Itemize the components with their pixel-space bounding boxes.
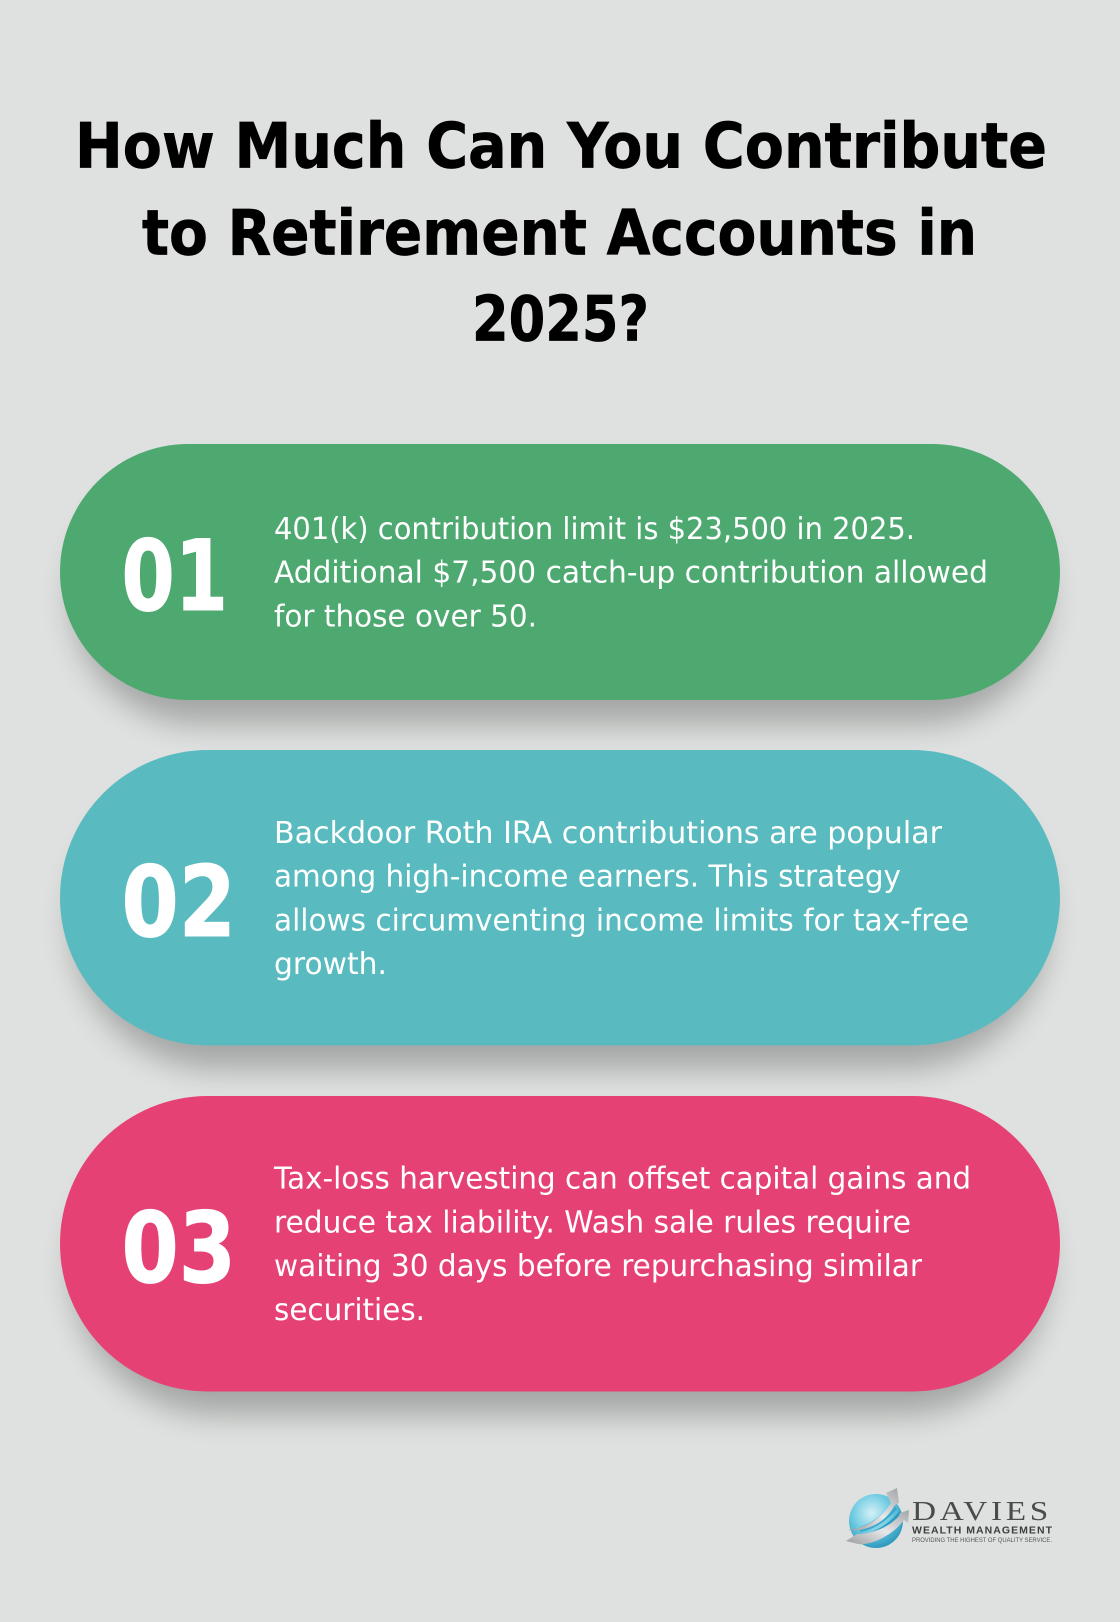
icon: globe with arrows [846,1488,909,1548]
panel: Tax-loss harvesting [60,1096,1060,1415]
wordmark: WEALTH MANAGEMENT [912,1524,1053,1536]
text block: Backdoor Roth [274,816,969,982]
number 03: 03 [122,1192,236,1306]
text block: Tax-loss harvesting: securities. [274,1293,425,1328]
text block: Backdoor Roth: Backdoor Roth IRA contributions are popular [274,816,943,851]
wordmark: PROVIDING THE HIGHEST OF QUALITY SERVICE. [912,1537,1052,1544]
number 02: 02 [122,846,236,960]
text block: Backdoor Roth: growth. [274,947,387,982]
panel: Backdoor Roth IRA [60,750,1060,1069]
text block: 401(k) limits: Additional $7,500 catch-up contribution allowed [274,556,988,590]
text block: Tax-loss harvesting: waiting 30 days before repurchasing similar [274,1249,923,1284]
text block: 401(k) limits: for those over 50. [274,600,537,634]
wordmark: DAVIES [912,1496,1052,1526]
panel: 401(k) contribution limit [60,444,1060,724]
wordmark [912,1496,1053,1544]
text block: 401(k) limits [274,512,988,634]
title: 2025? [472,282,649,356]
text block: Backdoor Roth: among high-income earners. This strategy [274,860,901,894]
text block: Tax-loss harvesting [273,1162,971,1328]
title: How Much Can You Contribute [75,110,1047,182]
title [75,110,1047,356]
text block: Tax-loss harvesting: reduce tax liability. Wash sale rules require [274,1206,911,1240]
number 01: 01 [122,520,228,634]
text block: Tax-loss harvesting: Tax-loss harvesting can offset capital gains and [273,1162,971,1196]
logo: Davies Wealth Management [846,1488,1053,1548]
title: to Retirement Accounts in [142,196,977,270]
text block: 401(k) limits: 401(k) contribution limit is $23,500 in 2025. [274,512,915,547]
text block: Backdoor Roth: allows circumventing income limits for tax-free [274,904,969,938]
